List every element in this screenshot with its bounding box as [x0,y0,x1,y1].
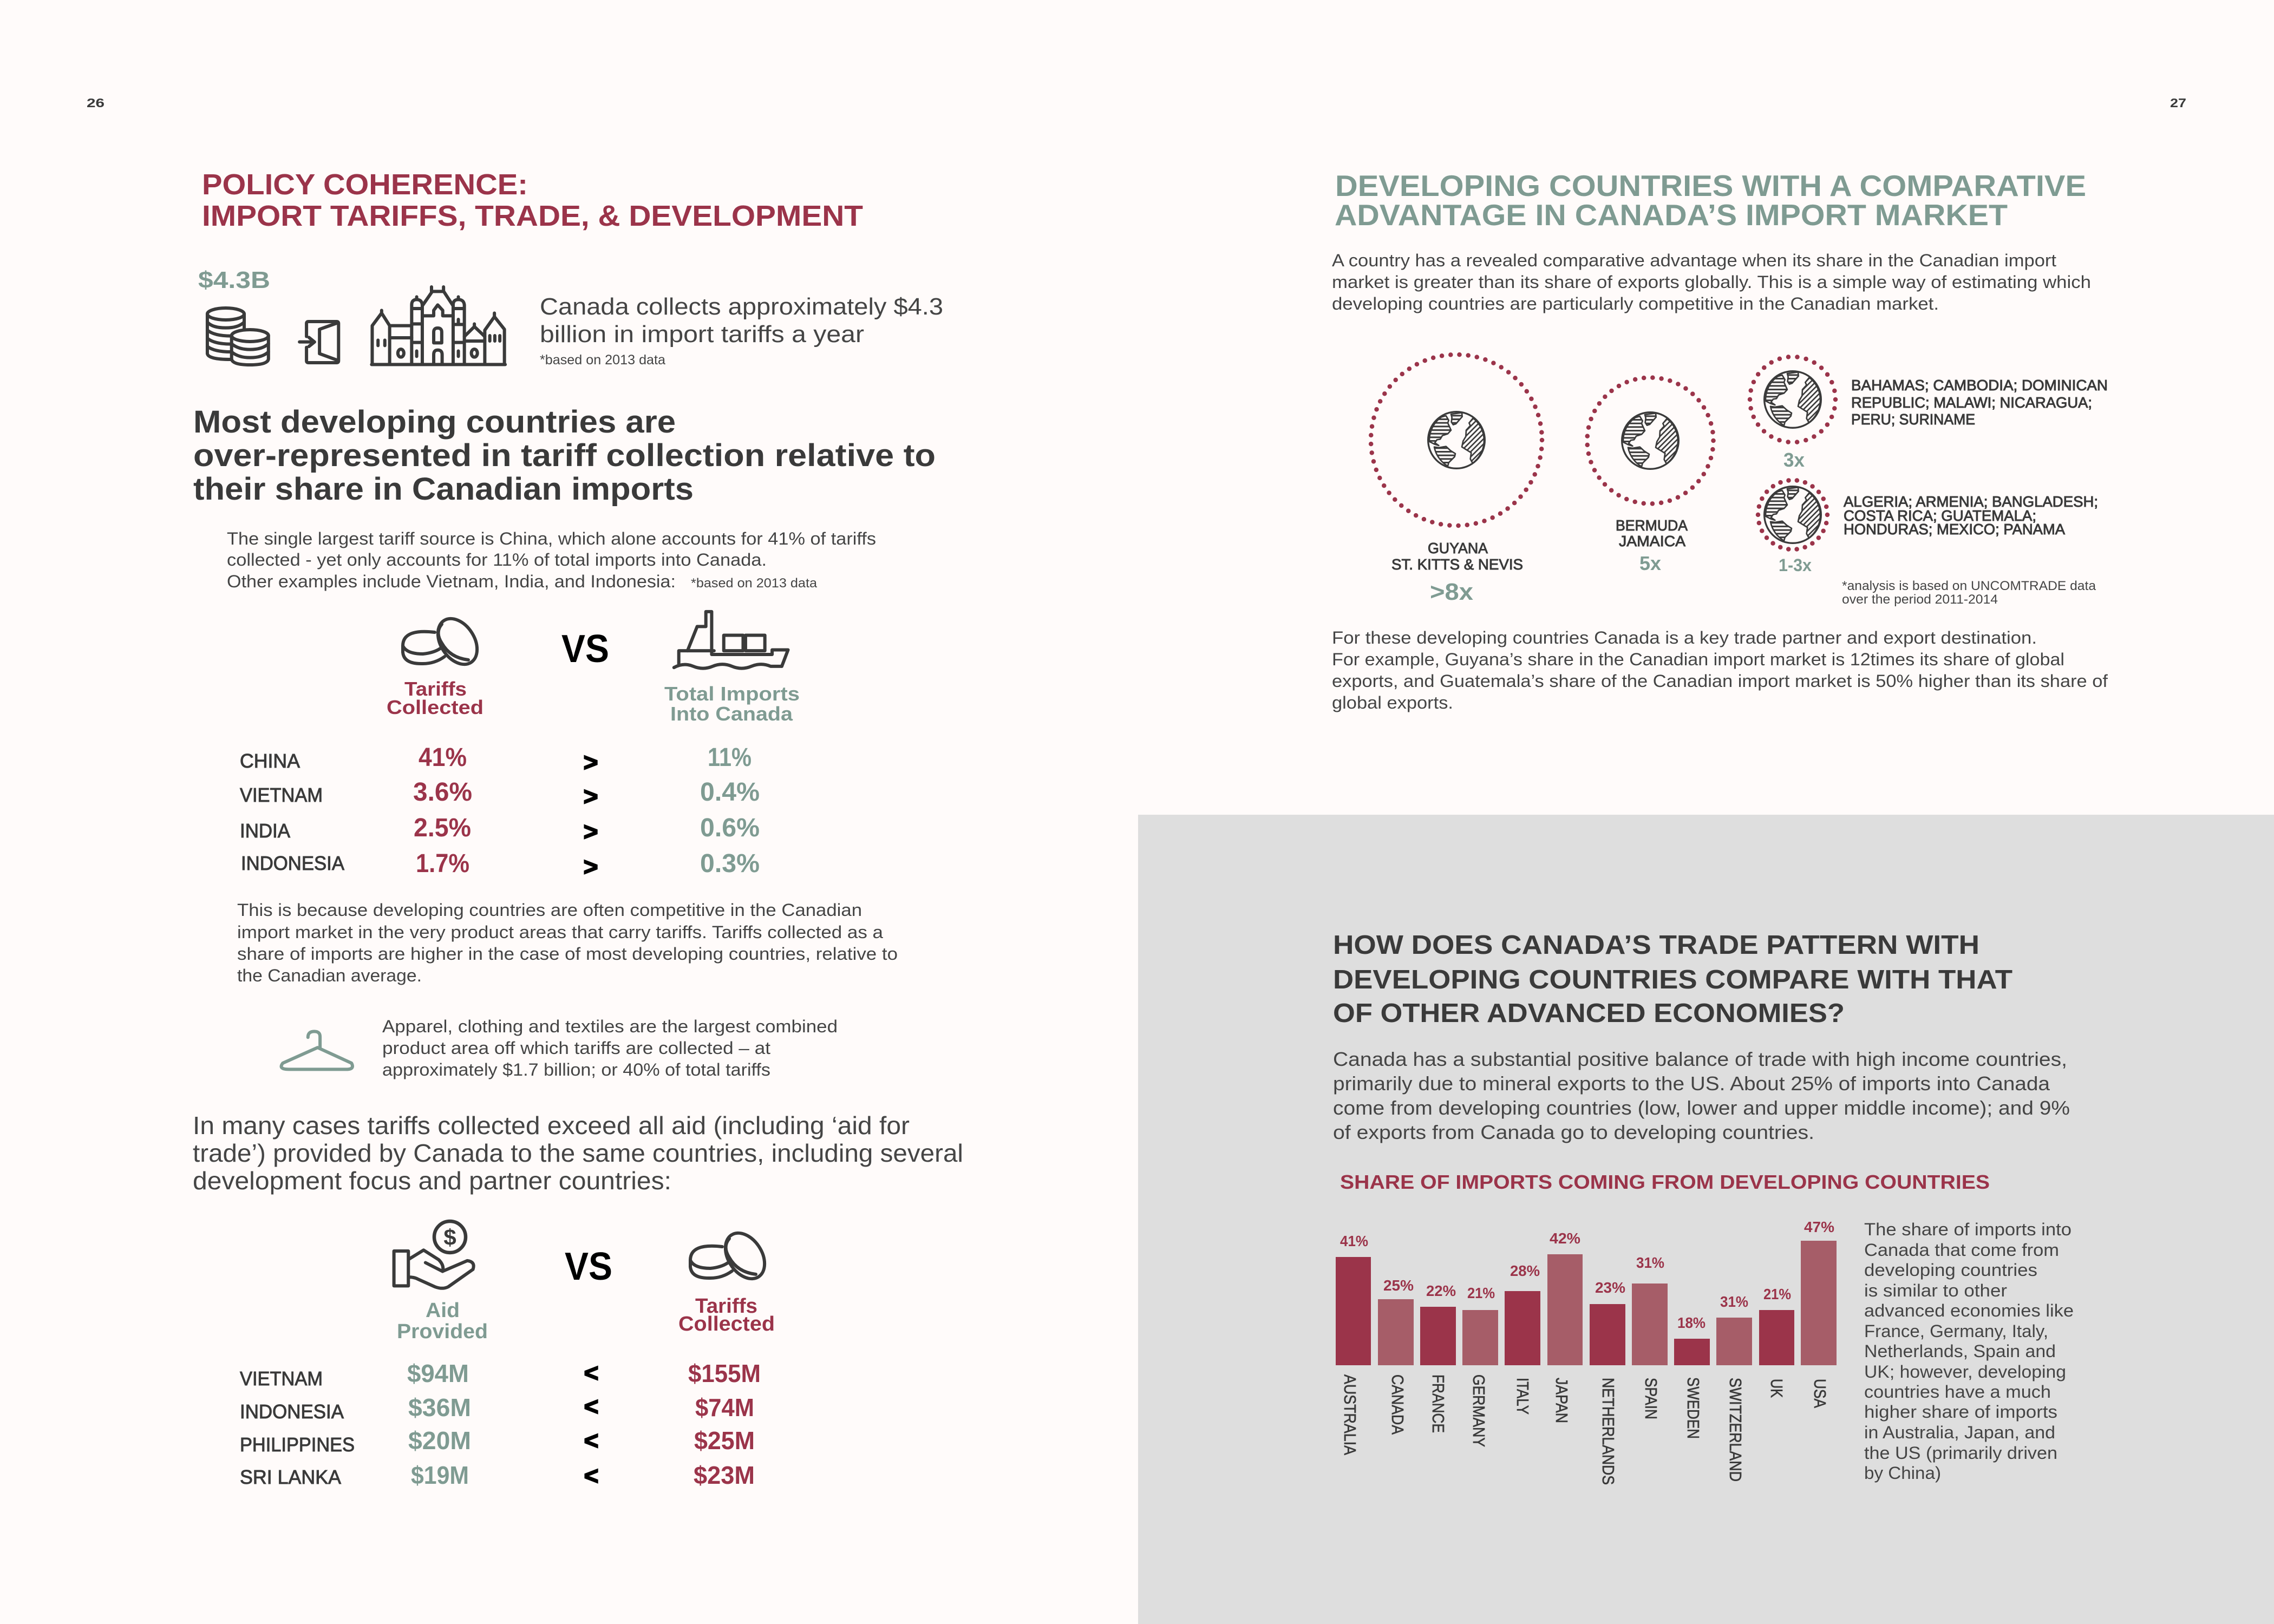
text: chart commentary: the US (primarily driven [1864,1443,2057,1463]
text: definition: A country has a revealed comparative advantage when its share in the Canadian import [1332,251,2056,270]
text: balance of trade [1333,1048,2070,1143]
bar: Canada: 25% [1383,1277,1414,1294]
text: chart commentary: Netherlands, Spain and [1864,1341,2056,1361]
row: Sri Lanka: SRI LANKA [240,1466,341,1488]
row: Sri Lanka: $19M [411,1461,469,1489]
text: tariffs exceed aid: In many cases tariffs collected exceed all aid (including ‘aid for [193,1111,910,1140]
text: competitive explanation: share of imports are higher in the case of most developing countries, relative to [237,944,898,964]
bar: UK [1759,1286,1794,1398]
row: Indonesia: INDONESIA [240,1400,344,1423]
bar: UK: 21% [1763,1286,1791,1302]
bar: Canada: CANADA [1388,1374,1407,1435]
text: balance of trade: Canada has a substantial positive balance of trade with high income countries, [1333,1048,2067,1070]
bar: Canada [1378,1277,1414,1435]
text: chart commentary: Canada that come from [1864,1240,2059,1260]
row: Indonesia: $74M [695,1393,754,1422]
globe group: 1-3x [1758,480,2098,575]
row: China: 41% [419,743,467,772]
text: China source: *based on 2013 data [691,576,818,591]
heading: over-represented: their share in Canadian imports [193,472,694,507]
bar chart [1336,1219,1837,1485]
bar: Australia: 41% [1340,1233,1368,1249]
bar: Spain: 31% [1636,1254,1664,1271]
bar: Japan: 42% [1550,1230,1580,1247]
column header: tariffs collected [387,678,483,718]
bar: Italy: 28% [1510,1262,1540,1279]
icon: coins [403,612,485,671]
column header: total imports [664,683,800,725]
row: Vietnam: VIETNAM [240,784,323,806]
bar: Australia: AUSTRALIA [1341,1374,1360,1455]
bar: Switzerland: SWITZERLAND [1726,1378,1745,1482]
bar: Netherlands: NETHERLANDS [1599,1378,1618,1485]
comparison table: aid vs tariffs [240,1221,775,1490]
text: key partner: For these developing countries Canada is a key trade partner and export destination. [1332,628,2037,647]
footnote [1842,579,2096,607]
heading [1333,931,2012,1028]
icon: container ship [674,612,788,669]
row: India: 0.6% [700,814,760,842]
bar: Germany [1462,1285,1498,1447]
globe group: 1-3x: ALGERIA; ARMENIA; BANGLADESH; [1844,493,2098,510]
row: Vietnam: VIETNAM [240,1367,323,1390]
text: apparel: product area off which tariffs are collected – at [382,1038,770,1058]
bar: Netherlands: 23% [1595,1279,1625,1296]
bar: Switzerland [1716,1293,1752,1482]
text: balance of trade: come from developing countries (low, lower and upper middle income); and 9% [1333,1097,2070,1119]
text: definition [1332,251,2091,313]
heading: over-represented: over-represented in tariff collection relative to [193,438,936,473]
column header: tariffs collected: Tariffs [695,1295,757,1318]
row: Philippines: PHILIPPINES [240,1433,355,1456]
text: China source [227,529,876,591]
row: Sri Lanka: < [584,1462,598,1490]
bar: Sweden [1674,1314,1710,1439]
globe group: 1-3x: COSTA RICA; GUATEMALA; [1844,507,2036,524]
page number left: 26 [87,96,104,110]
text: tariff collection [540,293,943,368]
row: Sri Lanka [240,1461,755,1490]
icon: hand with dollar coin: $ [443,1224,456,1250]
globe group: 5x: 5x [1639,552,1661,574]
row: India: 2.5% [414,814,471,842]
icon: coin stacks [207,308,269,365]
column header: tariffs collected: Collected [387,696,483,718]
chart title: SHARE OF IMPORTS COMING FROM DEVELOPING COUNTRIES [1340,1171,1990,1193]
column header: tariffs collected: Collected [678,1313,775,1335]
text: tariff collection: Canada collects approximately $4.3 [540,293,943,320]
column header: tariffs collected: Tariffs [404,678,467,700]
stat: $4.3B: $4.3B [198,267,270,293]
bar: Italy [1505,1262,1540,1415]
text: tariffs exceed aid: development focus and partner countries: [193,1167,671,1195]
heading: over-represented: Most developing countries are [193,404,676,440]
column header: aid provided: Aid [426,1299,460,1322]
title: IMPORT TARIFFS, TRADE, & DEVELOPMENT [202,200,863,232]
text: chart commentary: UK; however, developing [1864,1362,2066,1381]
text: key partner: global exports. [1332,693,1453,712]
row: Vietnam: $94M [407,1359,469,1387]
text: apparel: approximately $1.7 billion; or 40% of total tariffs [382,1060,770,1079]
globe group: greater than 8x: GUYANA [1428,540,1488,556]
footnote: over the period 2011-2014 [1842,592,1998,607]
column header: aid provided [397,1299,488,1343]
icon: parliament building [371,287,505,364]
row: Vietnam: 3.6% [413,778,472,807]
globe group: 3x: BAHAMAS; CAMBODIA; DOMINICAN [1851,377,2108,394]
row: India: > [584,817,598,846]
row: Philippines: $25M [694,1426,755,1455]
text: tariff collection: *based on 2013 data [540,352,665,368]
text: competitive explanation: This is because developing countries are often competitive in the Canadian [237,900,862,920]
bar: Italy: ITALY [1513,1378,1532,1415]
bar: Germany: GERMANY [1469,1374,1488,1447]
column header: total imports: Into Canada [670,703,793,725]
globe group: 5x: JAMAICA [1619,533,1686,549]
row: India [240,814,760,846]
bar: Japan: JAPAN [1552,1378,1571,1423]
bar: Spain [1632,1254,1668,1419]
panel: trade pattern comparison [1138,815,2274,1624]
comparison table: tariffs vs imports [240,612,800,881]
text: key partner: For example, Guyana’s share in the Canadian import market is 12times its share of global [1332,650,2064,669]
row: Indonesia: $36M [408,1393,471,1422]
icon: door with arrow [299,322,338,363]
bar: Netherlands [1590,1279,1625,1485]
bar: USA [1801,1219,1837,1408]
globe group: 3x: PERU; SURINAME [1851,411,1975,428]
globe group: 1-3x: HONDURAS; MEXICO; PANAMA [1844,521,2066,538]
globe group: 5x [1587,378,1713,574]
row: Indonesia [240,1392,754,1423]
bar: UK: UK [1767,1379,1786,1398]
grey background [1138,815,2274,1624]
row: Indonesia: < [584,1392,598,1420]
text: tariffs exceed aid: trade’) provided by Canada to the same countries, including several [193,1139,963,1167]
text: chart commentary: countries have a much [1864,1382,2051,1402]
title: POLICY COHERENCE: [202,168,528,201]
globe group: 3x: 3x [1783,449,1805,471]
row: Philippines [240,1426,755,1456]
row: Indonesia: 0.3% [700,849,760,878]
row: Indonesia: > [584,853,598,881]
page number right: 27 [2170,96,2186,110]
text: key partner: exports, and Guatemala’s share of the Canadian import market is 50% higher than its share of [1332,671,2108,691]
text: chart commentary: developing countries [1864,1260,2037,1280]
text: balance of trade: primarily due to mineral exports to the US. About 25% of imports into Canada [1333,1072,2050,1095]
row: Indonesia: 1.7% [416,849,469,878]
row: Vietnam: 0.4% [700,778,760,807]
text: chart commentary: is similar to other [1864,1281,2007,1300]
text: balance of trade: of exports from Canada go to developing countries. [1333,1121,1814,1143]
bar: Sweden: SWEDEN [1684,1377,1703,1439]
bar: USA: USA [1811,1379,1829,1408]
text: competitive explanation [237,900,898,985]
globe group: 3x [1750,357,2108,471]
text: chart commentary: The share of imports into [1864,1220,2072,1239]
row: China: 11% [708,743,752,772]
text: chart commentary [1864,1220,2074,1483]
heading: over-represented [193,404,936,507]
globe group: greater than 8x: ST. KITTS & NEVIS [1391,556,1523,573]
heading: ADVANTAGE IN CANADA’S IMPORT MARKET [1335,198,2008,232]
globe group: 1-3x: 1-3x [1779,555,1812,575]
footnote: *analysis is based on UNCOMTRADE data [1842,579,2096,593]
bar: France: 22% [1426,1282,1456,1299]
bar: Sweden: 18% [1677,1314,1706,1331]
text: chart commentary: advanced economies like [1864,1301,2074,1320]
text: competitive explanation: the Canadian average. [237,966,422,985]
bar: Australia [1336,1233,1371,1455]
column header: total imports: Total Imports [664,683,800,705]
row: Indonesia: INDONESIA [241,852,344,874]
bar: Japan [1547,1230,1583,1423]
text: China source: Other examples include Vietnam, India, and Indonesia: [227,572,676,591]
text: definition: developing countries are particularly competitive in the Canadian market. [1332,294,1939,313]
row: India: INDIA [240,820,290,842]
icon: hanger [282,1031,352,1069]
globe group: greater than 8x: >8x [1430,579,1474,605]
globe group: 3x: REPUBLIC; MALAWI; NICARAGUA; [1851,394,2092,411]
text: tariff collection: billion in import tariffs a year [540,321,864,348]
vs label: VS [565,1245,612,1288]
row: Vietnam [240,778,760,810]
row: Sri Lanka: $23M [694,1461,755,1489]
text: definition: market is greater than its share of exports globally. This is a simple way of estimating which [1332,272,2091,292]
row: China: CHINA [240,750,300,772]
icon: coins [690,1226,773,1286]
heading: OF OTHER ADVANCED ECONOMIES? [1333,999,1845,1028]
title [202,168,863,232]
text: chart commentary: higher share of imports [1864,1402,2057,1422]
text: apparel: Apparel, clothing and textiles are the largest combined [382,1017,838,1036]
column header: aid provided: Provided [397,1320,488,1343]
bar: USA: 47% [1804,1219,1834,1235]
text: chart commentary: in Australia, Japan, and [1864,1423,2055,1442]
bar: Spain: SPAIN [1642,1378,1661,1419]
text: China source: The single largest tariff source is China, which alone accounts for 41% of tariffs [227,529,876,548]
text: chart commentary: by China) [1864,1463,1941,1483]
text: tariffs exceed aid [193,1111,963,1195]
column header: tariffs collected [678,1295,775,1335]
globe group: 5x: BERMUDA [1616,517,1688,534]
globe group: greater than 8x [1371,355,1542,605]
row: Vietnam: $155M [688,1359,761,1387]
bar: Switzerland: 31% [1720,1293,1748,1310]
heading [1335,169,2086,232]
text: China source: collected - yet only accounts for 11% of total imports into Canada. [227,550,767,569]
row: Indonesia [241,849,760,881]
heading: DEVELOPING COUNTRIES COMPARE WITH THAT [1333,965,2012,994]
row: Vietnam [240,1359,761,1390]
panel: comparative advantage [1332,169,2108,712]
text: competitive explanation: import market in the very product areas that carry tariffs. Tariffs collected as a [237,922,883,942]
row: China [240,743,752,776]
row: Vietnam: < [584,1359,598,1387]
row: China: > [584,748,598,776]
panel: policy coherence left page [193,168,963,1490]
row: Philippines: $20M [408,1426,471,1455]
bar: France [1420,1282,1456,1433]
bar: France: FRANCE [1429,1374,1448,1433]
row: Philippines: < [584,1426,598,1455]
text: apparel [382,1017,838,1079]
icon: hand with dollar coin [394,1221,474,1288]
text: key partner [1332,628,2108,712]
heading: HOW DOES CANADA’S TRADE PATTERN WITH [1333,931,1979,960]
bar: Germany: 21% [1467,1285,1495,1301]
text: chart commentary: France, Germany, Italy, [1864,1321,2048,1341]
heading: DEVELOPING COUNTRIES WITH A COMPARATIVE [1335,169,2086,202]
row: Vietnam: > [584,782,598,810]
vs label: VS [561,627,609,671]
